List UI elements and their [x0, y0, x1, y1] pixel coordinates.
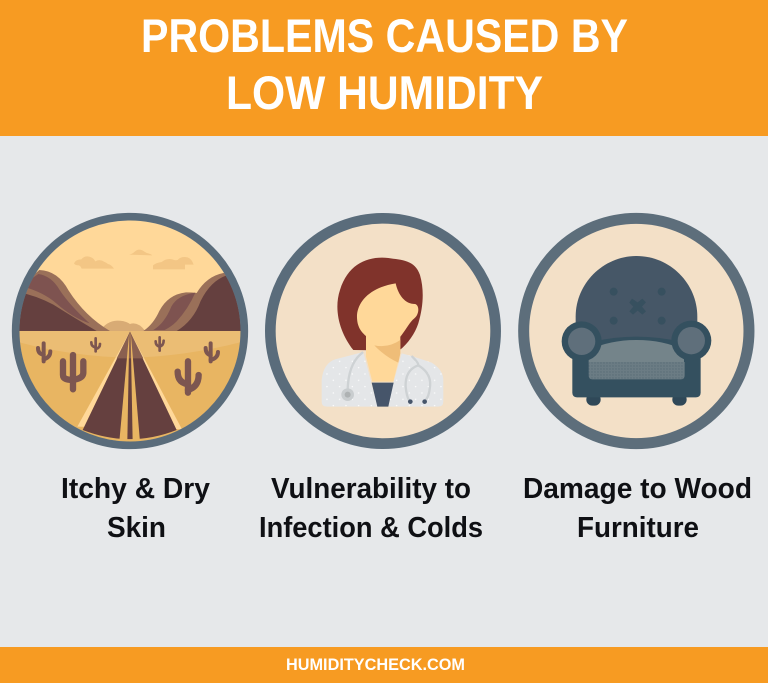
seat cushion: [589, 340, 684, 363]
ring: [16, 217, 244, 445]
title: PROBLEMS CAUSED BY: [141, 9, 628, 62]
footer url: HUMIDITYCHECK.COM: [286, 655, 465, 674]
chair base: [572, 347, 701, 397]
cacti: [38, 337, 218, 393]
label: vulnerability to infection and colds: Vulnerability to: [271, 473, 471, 505]
chair back: [576, 256, 697, 347]
label: vulnerability to infection and colds: [259, 473, 483, 544]
dark mountains: [20, 294, 96, 331]
face: [357, 283, 418, 345]
label: damage to wood furniture: Furniture: [577, 512, 699, 544]
label: vulnerability to infection and colds: Infection & Colds: [259, 512, 483, 544]
buttons: [610, 288, 666, 325]
left mountain back: [17, 270, 110, 331]
label: itchy and dry skin: Itchy & Dry: [61, 473, 210, 505]
footer banner: [0, 647, 768, 683]
shirt: [372, 383, 394, 407]
right mountain back: [143, 273, 243, 331]
stethoscope: [348, 353, 430, 400]
icon: desert road: [13, 217, 247, 445]
label: damage to wood furniture: Damage to Wood: [523, 473, 752, 505]
icon: armchair: [524, 218, 749, 444]
label: itchy and dry skin: Skin: [107, 512, 166, 544]
feet: [586, 393, 601, 406]
title: LOW HUMIDITY: [226, 66, 543, 119]
clouds: [74, 250, 194, 269]
label: itchy and dry skin: [61, 473, 210, 544]
armrests: [562, 321, 602, 361]
coat: [322, 352, 443, 407]
header banner: [0, 0, 768, 136]
sand: [20, 342, 240, 442]
icon: doctor: [270, 218, 496, 444]
far hill: [100, 321, 145, 331]
hair: [337, 258, 423, 351]
label: damage to wood furniture: [523, 473, 752, 544]
road: [77, 332, 182, 429]
neck: [366, 333, 400, 382]
title: [141, 9, 628, 119]
